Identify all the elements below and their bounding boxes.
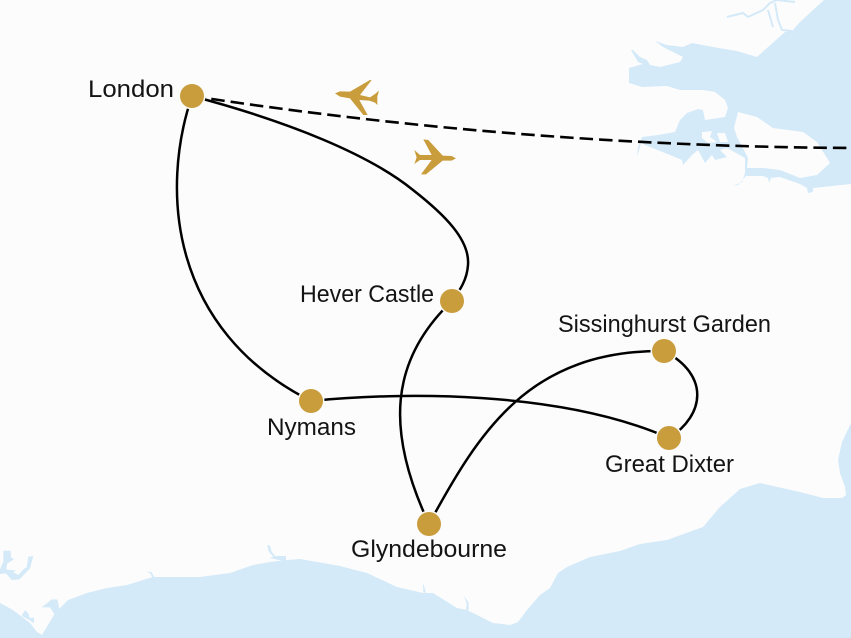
icon: airplane heading left [335, 80, 379, 115]
flight route: dashed line [192, 96, 851, 148]
marker and label: Nymans: Nymans [267, 414, 356, 441]
marker and label: London: London [88, 76, 174, 103]
marker and label: Sissinghurst Garden: Sissinghurst Garden [558, 311, 771, 338]
water: Thames estuary [629, 0, 851, 193]
marker and label: Nymans [267, 389, 356, 441]
marker and label: London [88, 76, 204, 108]
driving route: curves [177, 96, 697, 524]
marker and label: Glyndebourne [351, 512, 507, 563]
water: south coast [0, 423, 851, 638]
marker and label: Great Dixter: Great Dixter [605, 451, 734, 478]
icon: airplane heading right [414, 139, 456, 174]
marker and label: Sissinghurst Garden [558, 311, 771, 363]
marker and label: Glyndebourne: Glyndebourne [351, 536, 507, 563]
marker and label: Great Dixter [605, 426, 734, 478]
water: coastal inlets [0, 545, 286, 623]
marker and label: Hever Castle: Hever Castle [300, 281, 434, 308]
water: river mouths [423, 583, 469, 610]
